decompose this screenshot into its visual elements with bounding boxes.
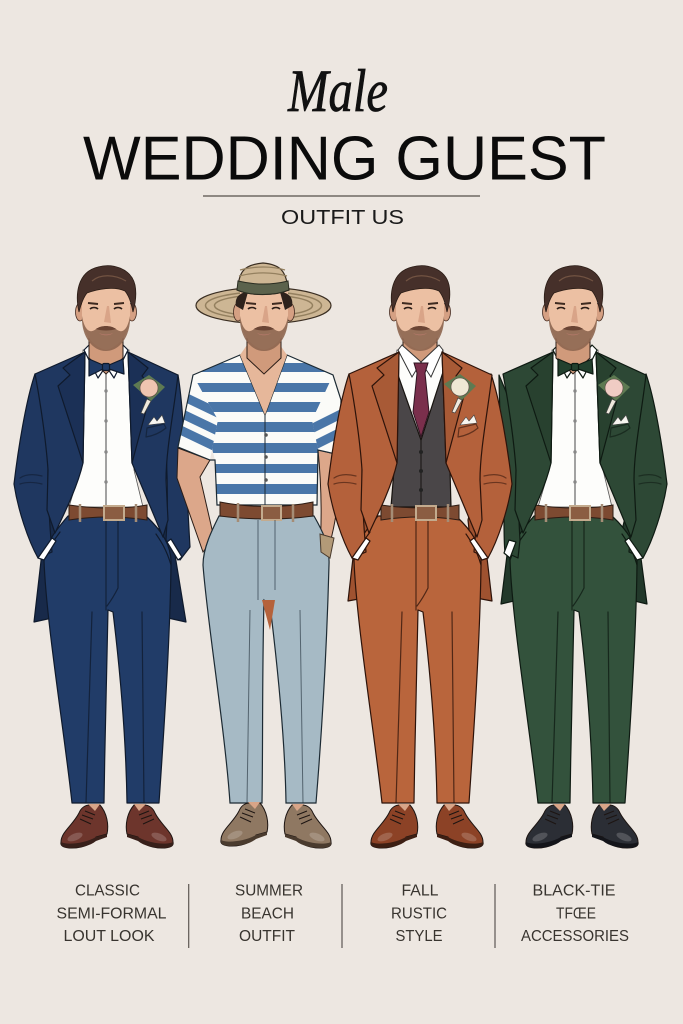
shoes [371, 804, 483, 848]
pocket square [610, 415, 630, 437]
caption: classic semi-formal: SEMI-FORMAL [56, 906, 167, 922]
shoes [526, 804, 638, 848]
figure: summer striped shirt and straw hat [170, 263, 350, 848]
right sleeve [164, 375, 190, 560]
script word: Male: Male [287, 58, 388, 124]
caption: black-tie accessories: TFŒE [556, 906, 596, 922]
right sleeve [470, 374, 512, 560]
caption: fall rustic: RUSTIC [391, 906, 447, 922]
shirt with stripes [170, 355, 350, 505]
shoes [221, 802, 331, 848]
caption: classic semi-formal: CLASSIC [75, 882, 140, 900]
jacket tails [501, 490, 647, 604]
caption: summer beach: BEACH [241, 906, 294, 922]
white shirt [392, 350, 448, 470]
belt [381, 504, 459, 522]
left sleeve [14, 374, 56, 560]
caption: black-tie accessories [521, 882, 629, 945]
belt [535, 504, 613, 522]
figure: navy suit with bow tie [14, 266, 190, 848]
hat brim [196, 288, 331, 324]
trouser cuff lines [247, 520, 303, 803]
shoes [61, 804, 173, 848]
caption: fall rustic: FALL [402, 882, 439, 900]
waistcoat [391, 372, 451, 507]
pocket square [458, 415, 478, 437]
left arm [177, 448, 214, 552]
belt [220, 502, 313, 522]
title block [83, 58, 606, 229]
bow tie [89, 359, 124, 376]
shirt [69, 345, 143, 507]
shirt [538, 345, 612, 507]
caption: summer beach: OUTFIT [239, 928, 296, 945]
jacket [503, 352, 646, 537]
figure: forest green suit with bow tie [499, 266, 667, 848]
main heading: WEDDING GUEST [83, 124, 606, 194]
trousers [510, 516, 637, 803]
subheading: OUTFIT US [281, 207, 404, 229]
watch bracelet [320, 534, 334, 558]
right arm [318, 450, 340, 560]
boutonniere [598, 375, 630, 414]
burgundy tie [413, 363, 429, 437]
collar [398, 345, 443, 377]
caption: classic semi-formal [56, 882, 167, 945]
right sleeve [625, 374, 667, 560]
pocket square [146, 415, 166, 437]
jacket tails [348, 480, 492, 601]
trousers [44, 516, 171, 803]
jacket tail sliver behind striped figure [262, 600, 275, 630]
jacket [35, 352, 178, 537]
trousers [203, 516, 329, 803]
boutonniere [444, 374, 476, 413]
hat crown [237, 263, 289, 294]
figure: rust three-piece suit [328, 266, 512, 848]
caption: classic semi-formal: LOUT LOOK [64, 928, 155, 945]
caption: black-tie accessories: ACCESSORIES [521, 928, 629, 945]
caption: summer beach [235, 882, 303, 945]
head [234, 279, 294, 415]
caption: fall rustic [391, 882, 447, 945]
left sleeve [328, 374, 370, 560]
caption: summer beach: SUMMER [235, 882, 303, 900]
jacket [349, 352, 492, 537]
caption: black-tie accessories: BLACK-TIE [532, 882, 616, 900]
boutonniere [133, 375, 165, 414]
bow tie [558, 359, 593, 376]
caption: fall rustic: STYLE [396, 928, 442, 945]
belt [69, 504, 147, 522]
left sleeve [499, 375, 520, 558]
trousers [354, 516, 481, 803]
